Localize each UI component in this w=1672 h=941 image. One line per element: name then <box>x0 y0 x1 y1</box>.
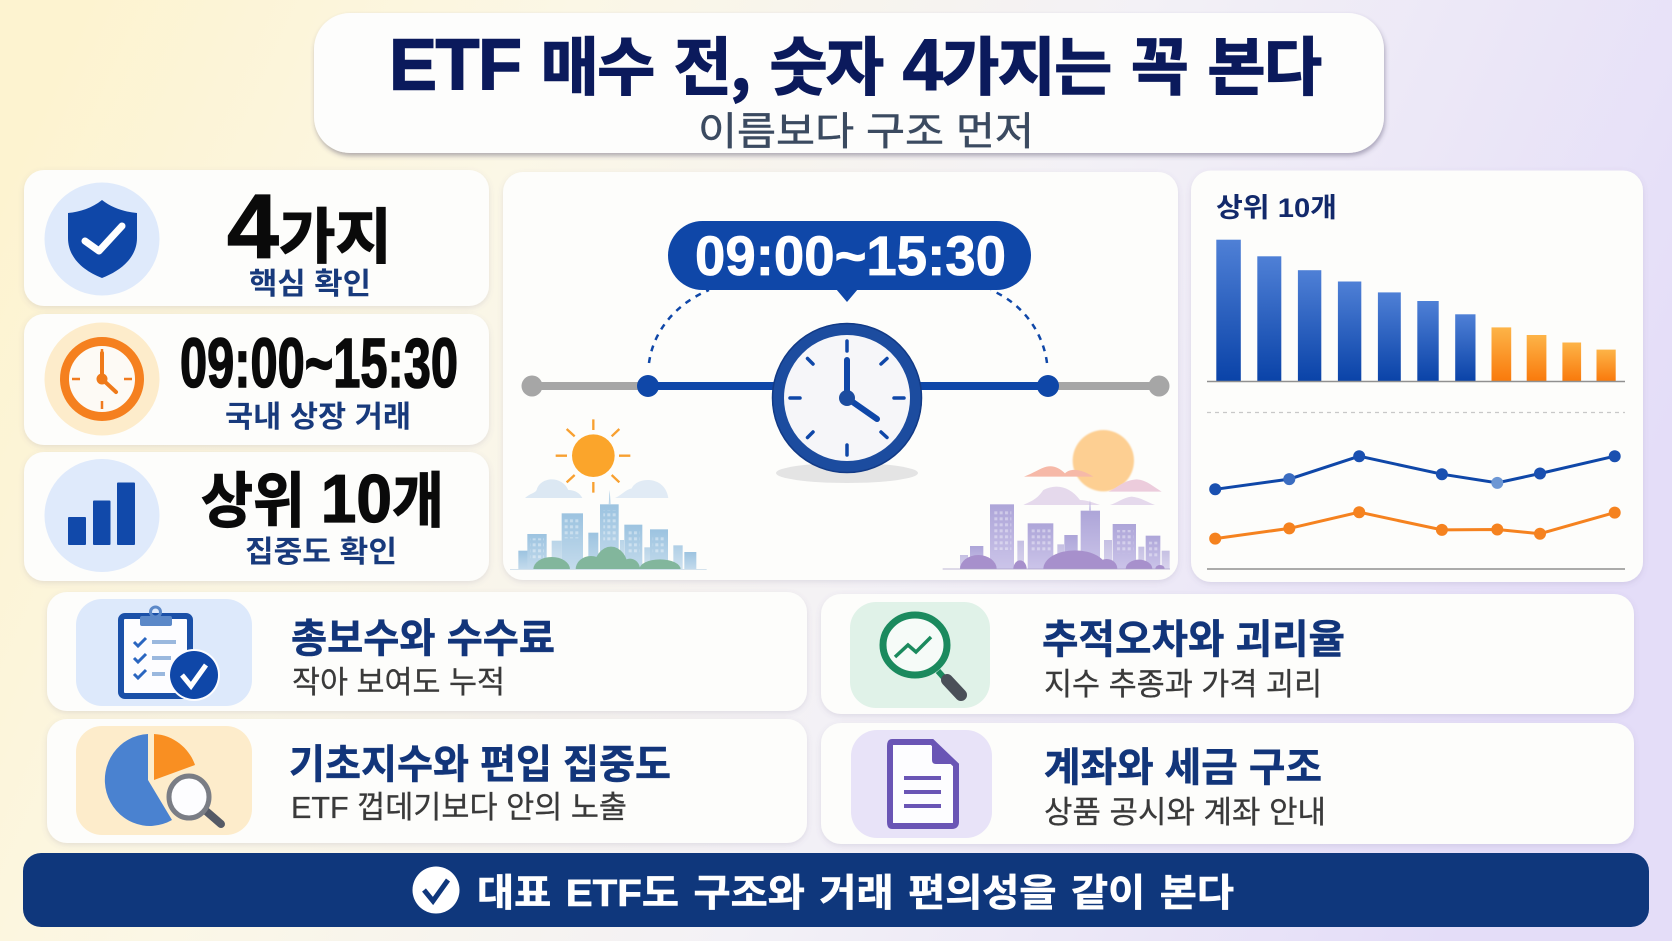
card description: 지수 추종과 가격 괴리 <box>1044 659 1322 704</box>
title panel <box>314 13 1384 157</box>
icon: orange clock <box>44 322 160 436</box>
panel: charts <box>1191 170 1643 582</box>
card heading: 총보수와 수수료 <box>291 606 555 664</box>
card: 추적오차와 괴리율 <box>821 594 1634 714</box>
panel: trading hours timeline <box>503 172 1178 592</box>
callout: 거래 시간 <box>668 221 1031 302</box>
chart heading: 상위 10개 <box>1216 186 1337 225</box>
card heading: 계좌와 세금 구조 <box>1044 735 1322 793</box>
subtitle: 이름보다 구조 먼저 <box>698 101 1034 157</box>
icon: green magnifier <box>850 602 990 708</box>
bar chart <box>1207 240 1625 382</box>
line chart <box>1207 450 1625 569</box>
card: 계좌와 세금 구조 <box>821 723 1634 844</box>
stat card: 거래 시간 <box>24 314 489 445</box>
bottom banner <box>23 853 1649 927</box>
card: 기초지수와 편입 집중도 <box>47 719 807 843</box>
title: ETF 매수 전, 숫자 4가지는 꼭 본다 <box>389 18 1322 108</box>
icon: clock <box>772 324 922 483</box>
illustration: morning city <box>510 419 707 570</box>
card description: ETF 껍데기보다 안의 노출 <box>291 782 627 827</box>
icon: bars <box>44 459 160 572</box>
stat label: 핵심 확인 <box>249 259 371 303</box>
banner text: 대표 ETF도 구조와 거래 편의성을 같이 본다 <box>477 862 1234 917</box>
callout: 거래 시간: 09:00~15:30 <box>695 224 1006 287</box>
icon: check circle <box>412 866 460 914</box>
stat label: 집중도 확인 <box>245 527 397 571</box>
stat card: 상위 10개 <box>24 452 489 581</box>
icon: clipboard check <box>76 599 252 706</box>
card: 총보수와 수수료 <box>47 592 807 711</box>
card heading: 기초지수와 편입 집중도 <box>289 732 671 790</box>
stat value: 4가지 <box>227 177 392 278</box>
stat card: 4가지 <box>24 170 489 306</box>
timeline track <box>522 290 1170 397</box>
card heading: 추적오차와 괴리율 <box>1042 607 1345 665</box>
illustration: evening city <box>942 429 1170 570</box>
card description: 상품 공시와 계좌 안내 <box>1044 787 1326 832</box>
icon: document <box>851 730 992 838</box>
stat label: 국내 상장 거래 <box>225 392 411 436</box>
card description: 작아 보여도 누적 <box>292 657 505 702</box>
stat value: 09:00~15:30 <box>180 324 458 402</box>
icon: pie with magnifier <box>76 726 252 835</box>
stat value: 상위 10개 <box>201 453 444 540</box>
icon: shield check <box>44 182 160 296</box>
icon: sun <box>556 419 630 493</box>
